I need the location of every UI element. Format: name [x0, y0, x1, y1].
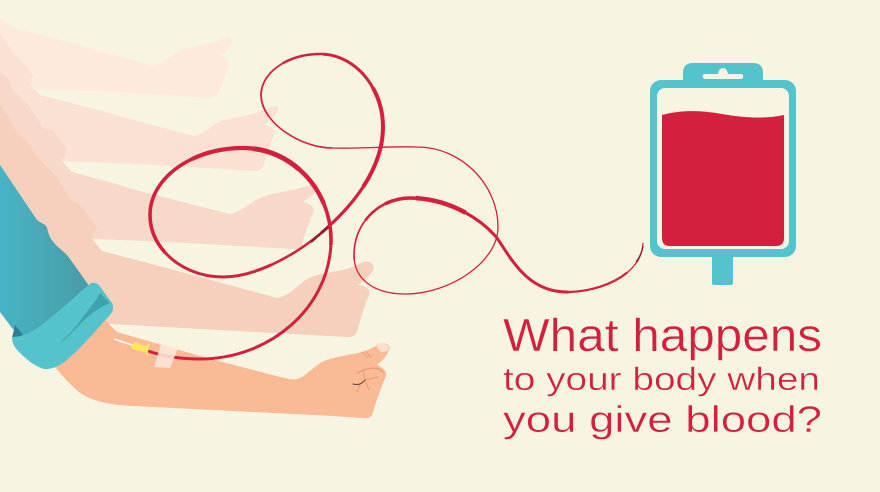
sleeve cuff — [12, 283, 113, 369]
blood level — [662, 111, 784, 246]
blood bag — [650, 63, 796, 285]
main arm with hand — [55, 320, 390, 418]
medical tape — [154, 344, 178, 368]
ghost arm: lower faded position — [0, 103, 374, 337]
hanger slot — [703, 68, 743, 79]
title — [503, 309, 822, 440]
title: to your body when — [503, 361, 820, 397]
ghost arm: top faded position — [0, 18, 232, 98]
title: What happens — [503, 309, 822, 361]
cuff fold shadow — [58, 293, 110, 345]
hand knuckle and finger lines — [353, 351, 383, 392]
ghost arm: upper faded position — [0, 33, 278, 172]
icon: thumbnail — [376, 343, 389, 352]
bag outer frame — [650, 80, 796, 257]
sleeve — [0, 165, 113, 369]
bag interior — [657, 88, 789, 249]
bag outlet stem — [712, 250, 733, 285]
blood tube — [148, 54, 643, 359]
sleeve inner shadow — [12, 325, 24, 338]
bag hanger tab — [683, 63, 763, 82]
needle — [114, 339, 132, 345]
ghost arm: middle faded position — [0, 72, 318, 255]
title: you give blood? — [503, 399, 822, 440]
icon: needle hub — [131, 342, 150, 356]
